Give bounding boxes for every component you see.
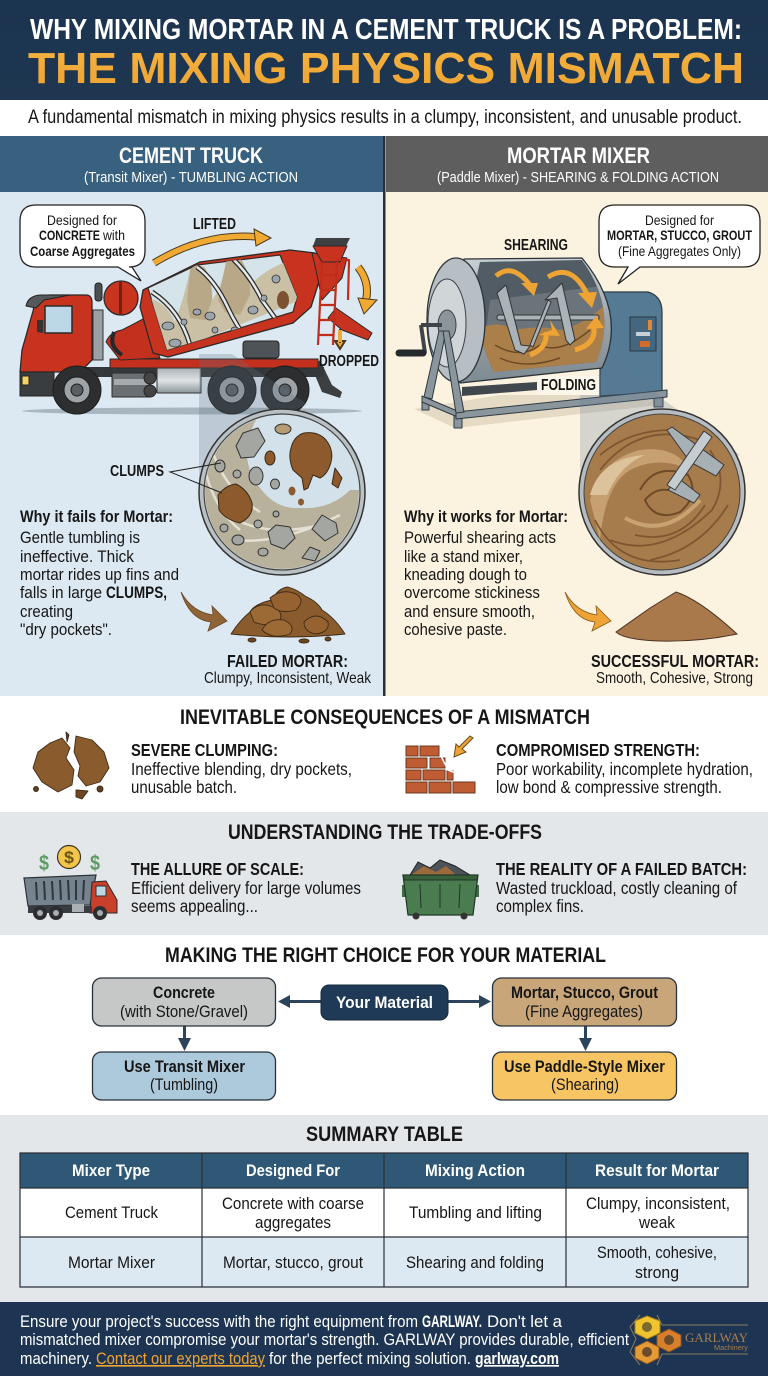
- panel: cement truck: [0, 136, 384, 696]
- reality of a failed batch: Wasted truckload, costly cleaning of: [496, 878, 737, 898]
- arrow: to failed mortar: [181, 592, 227, 631]
- magnified circle: clumps in drum: [195, 409, 370, 580]
- footer call to action: [20, 1313, 629, 1368]
- row: mortar mixer: Mortar, stucco, grout: [223, 1254, 363, 1272]
- table header row: Result for Mortar: [595, 1162, 720, 1180]
- title line 2: THE MIXING PHYSICS MISMATCH: [28, 44, 744, 93]
- icon: dumpster: [402, 860, 479, 920]
- panel heading: mortar mixer: [386, 136, 768, 192]
- box: mortar stucco grout: [492, 978, 676, 1026]
- arrow: to successful mortar: [565, 592, 611, 631]
- label: lifted: LIFTED: [193, 216, 236, 233]
- text: why it works: Why it works for Mortar:: [404, 508, 568, 526]
- row: cement truck: weak: [638, 1214, 676, 1232]
- speech bubble: designed for mortar: (Fine Aggregates Only): [618, 243, 741, 259]
- end cap: [427, 258, 485, 382]
- icon: cracked bricks: [406, 736, 475, 793]
- hopper and chute: [312, 253, 347, 300]
- text: why it works: Powerful shearing acts: [404, 528, 556, 547]
- reality of a failed batch: complex fins.: [496, 896, 584, 916]
- text: why it works: and ensure smooth,: [404, 602, 535, 621]
- exhaust: [95, 283, 102, 301]
- box: concrete: (with Stone/Gravel): [120, 1003, 248, 1021]
- box: use transit mixer: [92, 1052, 276, 1100]
- cab: [20, 295, 92, 372]
- footer call to action: mismatched mixer compromise your mortar's strength. GARLWAY provides durable, efficient: [20, 1331, 629, 1349]
- logo: garlway machinery: Machinery: [714, 1345, 749, 1352]
- control box: [600, 292, 662, 396]
- row: mortar mixer: Smooth, cohesive,: [597, 1244, 717, 1262]
- allure of scale: seems appealing...: [131, 896, 258, 916]
- panel heading: mortar mixer: (Paddle Mixer) - SHEARING & FOLDING ACTION: [437, 169, 719, 186]
- speech bubble: designed for concrete: Designed for: [47, 212, 117, 228]
- box: mortar stucco grout: (Fine Aggregates): [525, 1003, 643, 1021]
- footer call to action: for the perfect mixing solution.: [269, 1350, 471, 1368]
- text: why it works: cohesive paste.: [404, 620, 507, 639]
- label: folding: FOLDING: [541, 377, 596, 394]
- panel heading: cement truck: [0, 136, 384, 192]
- text: why it fails: falls in large: [20, 583, 102, 602]
- text: why it works: like a stand mixer,: [404, 547, 523, 566]
- allure of scale: Efficient delivery for large volumes: [131, 878, 361, 898]
- water tank sphere: [104, 281, 138, 315]
- row: cement truck: Cement Truck: [65, 1204, 159, 1222]
- row: cement truck: Clumpy, inconsistent,: [586, 1195, 730, 1213]
- heading: summary table: SUMMARY TABLE: [306, 1123, 463, 1146]
- result: failed mortar: Clumpy, Inconsistent, Weak: [204, 670, 372, 687]
- rails and base frame: [462, 382, 537, 396]
- logo: garlway machinery: [630, 1315, 749, 1365]
- box: use paddle-style mixer: [492, 1052, 676, 1100]
- row: cement truck: aggregates: [255, 1214, 331, 1232]
- footer: [0, 1302, 768, 1376]
- text: why it fails: creating: [20, 602, 73, 621]
- illustration: paddle mixer: [399, 258, 667, 428]
- text: why it fails: "dry pockets".: [20, 620, 112, 639]
- heading: trade-offs: UNDERSTANDING THE TRADE-OFFS: [228, 821, 542, 844]
- text: why it works: [404, 508, 568, 639]
- drum: [447, 258, 611, 383]
- compromised strength: [496, 740, 753, 797]
- icon: failed mortar pile: [231, 587, 345, 643]
- row: mortar mixer: strong: [635, 1264, 679, 1282]
- compromised strength: low bond & compressive strength.: [496, 777, 722, 797]
- footer call to action: Ensure your project's success with the right equipment from: [20, 1313, 418, 1331]
- paddles: [497, 283, 599, 354]
- panel heading: cement truck: CEMENT TRUCK: [119, 143, 263, 168]
- footer call to action: machinery.: [20, 1350, 92, 1368]
- text: why it fails: [20, 508, 179, 639]
- text: why it fails: ineffective. Thick: [20, 547, 134, 566]
- box: use transit mixer: Use Transit Mixer: [124, 1058, 246, 1076]
- heading: consequences: INEVITABLE CONSEQUENCES OF A MISMATCH: [180, 706, 590, 729]
- row: mortar mixer: Mortar Mixer: [68, 1254, 155, 1272]
- table header row: Mixing Action: [425, 1162, 525, 1180]
- speech bubble: designed for concrete: CONCRETE: [39, 227, 100, 243]
- section: decision flow: [0, 935, 768, 1115]
- section: trade-offs: [0, 812, 768, 935]
- panel heading: mortar mixer: MORTAR MIXER: [507, 143, 650, 168]
- severe clumping: Ineffective blending, dry pockets,: [131, 759, 352, 779]
- logo: garlway machinery: GARLWAY: [685, 1330, 749, 1345]
- severe clumping: SEVERE CLUMPING:: [131, 740, 278, 760]
- box: concrete: [92, 978, 276, 1026]
- heading: right choice: MAKING THE RIGHT CHOICE FOR YOUR MATERIAL: [165, 944, 606, 967]
- severe clumping: unusable batch.: [131, 777, 237, 797]
- box: mortar stucco grout: Mortar, Stucco, Grout: [511, 984, 658, 1002]
- label: shearing: SHEARING: [504, 237, 568, 254]
- header banner: [0, 0, 768, 100]
- text: why it fails: CLUMPS,: [106, 583, 167, 602]
- table: [20, 1153, 748, 1287]
- text: why it works: kneading dough to: [404, 565, 527, 584]
- icon: dump truck with money: $: [39, 852, 49, 875]
- box: use transit mixer: (Tumbling): [150, 1076, 218, 1094]
- box: use paddle-style mixer: (Shearing): [551, 1076, 619, 1094]
- translucent callout beam: [199, 354, 307, 485]
- row: mortar mixer: [68, 1244, 717, 1282]
- row: mortar mixer: Shearing and folding: [406, 1254, 544, 1272]
- rear frame: [312, 360, 342, 398]
- reality of a failed batch: [496, 859, 747, 916]
- footer call to action: GARLWAY.: [422, 1313, 482, 1331]
- speech bubble: designed for concrete: Coarse Aggregates: [30, 243, 135, 259]
- magnified circle: smooth mortar: [579, 409, 745, 575]
- pedestal and hose: [106, 318, 160, 360]
- speech bubble: designed for concrete: [20, 205, 145, 281]
- allure of scale: THE ALLURE OF SCALE:: [131, 859, 304, 879]
- speech bubble: designed for concrete: with: [102, 227, 125, 243]
- panel heading: cement truck: (Transit Mixer) - TUMBLING ACTION: [84, 169, 298, 186]
- allure of scale: [131, 859, 361, 916]
- text: why it fails: Gentle tumbling is: [20, 528, 140, 547]
- icon: cracked clump: [33, 732, 109, 799]
- table header row: Designed For: [246, 1162, 341, 1180]
- footer call to action: Contact our experts today: [96, 1350, 266, 1368]
- section: consequences: [0, 696, 768, 812]
- box: use paddle-style mixer: Use Paddle-Style Mixer: [504, 1058, 666, 1076]
- speech bubble: designed for mortar: Designed for: [645, 212, 714, 228]
- wheels: [53, 366, 309, 414]
- icon: smooth mortar pile: [616, 592, 737, 641]
- result: failed mortar: [204, 651, 372, 687]
- result: successful mortar: [591, 651, 759, 687]
- compromised strength: COMPROMISED STRENGTH:: [496, 740, 700, 760]
- footer call to action: Don't let a: [487, 1313, 563, 1331]
- text: why it fails: mortar rides up fins and: [20, 565, 179, 584]
- row: cement truck: Concrete with coarse: [222, 1195, 364, 1213]
- table header row: [72, 1162, 720, 1180]
- row: cement truck: [65, 1195, 730, 1232]
- arrows between boxes: [178, 995, 592, 1051]
- arrow: right down: [358, 267, 377, 314]
- panel: mortar mixer: [383, 136, 768, 696]
- crank: [399, 325, 442, 353]
- orange motion arrows: [496, 271, 594, 355]
- arrow: dropped: [335, 329, 345, 349]
- label: dropped: DROPPED: [319, 353, 379, 370]
- text: why it fails: Why it fails for Mortar:: [20, 508, 173, 526]
- icon: dump truck with money: $: [64, 848, 75, 867]
- box: your material: [321, 985, 448, 1020]
- box: your material: Your Material: [336, 994, 433, 1012]
- box: concrete: Concrete: [153, 984, 215, 1002]
- ladder: [318, 260, 349, 345]
- speech bubble: designed for mortar: [599, 205, 760, 284]
- drum: [140, 250, 322, 357]
- text: why it works: overcome stickiness: [404, 583, 540, 602]
- arrow: lifted: [154, 229, 271, 263]
- icon: dump truck with money: [24, 846, 117, 920]
- illustration: cement truck: [20, 238, 372, 414]
- translucent callout beam: [580, 358, 740, 510]
- severe clumping: [131, 740, 352, 797]
- footer call to action: garlway.com: [475, 1350, 559, 1368]
- icon: dump truck with money: $: [90, 852, 100, 875]
- subtitle band: [0, 100, 768, 136]
- row: cement truck: Tumbling and lifting: [409, 1204, 542, 1222]
- label: clumps: [110, 463, 222, 493]
- table header row: Mixer Type: [72, 1162, 150, 1180]
- section: summary table: [0, 1115, 768, 1302]
- label: clumps: CLUMPS: [110, 463, 164, 480]
- result: failed mortar: FAILED MORTAR:: [227, 651, 348, 671]
